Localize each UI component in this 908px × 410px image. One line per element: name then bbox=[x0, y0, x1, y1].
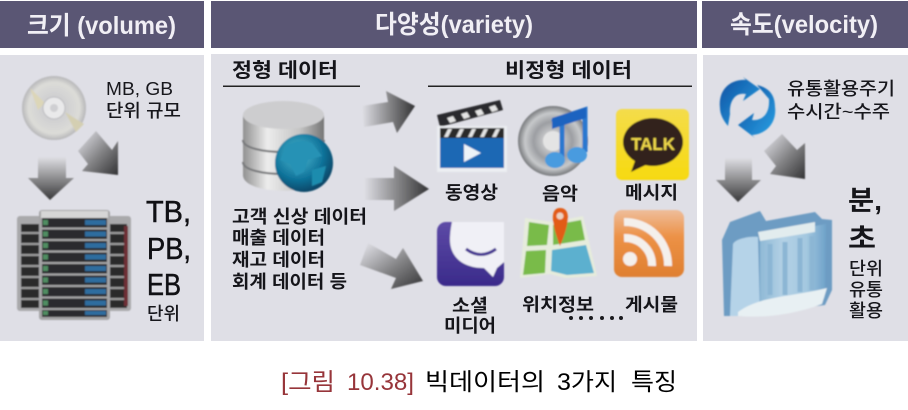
heading: volume: 크기 (volume) bbox=[27, 12, 176, 40]
panel background: volume bbox=[0, 55, 204, 341]
text: minutes, seconds unit: 활용 bbox=[849, 301, 883, 321]
label: video: 동영상 bbox=[445, 183, 498, 203]
heading bar: volume bbox=[0, 1, 204, 48]
caption: 빅데이터의 bbox=[425, 369, 545, 396]
text: minutes, seconds unit: 유통 bbox=[849, 280, 883, 300]
arrow: to unstructured, top bbox=[362, 91, 415, 133]
heading: variety: 다양성(variety) bbox=[375, 11, 533, 39]
text: MB, GB unit scale bbox=[106, 79, 181, 121]
panel: variety bbox=[211, 1, 697, 341]
icon: refresh arrows bbox=[720, 77, 775, 138]
ellipsis dots bbox=[569, 316, 623, 320]
text: TB, PB, EB unit: TB, bbox=[146, 194, 191, 229]
text: TB, PB, EB unit: PB, bbox=[147, 231, 191, 266]
text: minutes, seconds unit: 단위 bbox=[849, 259, 883, 279]
icon: map with pin bbox=[520, 208, 597, 278]
icon: database with globe bbox=[243, 101, 333, 192]
label: location info: 위치정보 bbox=[522, 295, 594, 315]
icon: disc bbox=[22, 76, 86, 140]
panel: volume bbox=[0, 1, 204, 341]
text: TB, PB, EB unit bbox=[146, 194, 191, 324]
icon: social media bbox=[437, 222, 504, 286]
heading bar: variety bbox=[211, 1, 697, 48]
arrow: disc to server, diagonal bbox=[78, 131, 118, 175]
icon: rss feed bbox=[614, 210, 684, 277]
text: minutes, seconds unit: 분, bbox=[848, 186, 882, 216]
icon: video clapperboard bbox=[437, 100, 507, 172]
text: minutes, seconds unit bbox=[848, 186, 883, 321]
text: TB, PB, EB unit: EB bbox=[147, 267, 181, 302]
label: social media: 미디어 bbox=[444, 316, 496, 336]
text: distribution cycle: 수시간~수주 bbox=[787, 102, 890, 122]
heading bar: velocity bbox=[702, 1, 908, 48]
caption bbox=[281, 369, 677, 396]
icon: music bbox=[518, 106, 588, 176]
label: music: 음악 bbox=[542, 184, 578, 204]
text: structured data list: 회계 데이터 등 bbox=[232, 272, 347, 292]
text: distribution cycle: 유통활용주기 bbox=[787, 79, 895, 99]
text: structured data list: 재고 데이터 bbox=[232, 250, 325, 270]
subheading: unstructured data: 비정형 데이터 bbox=[505, 59, 632, 82]
text: MB, GB unit scale: 단위 규모 bbox=[106, 101, 181, 121]
text: structured data list: 매출 데이터 bbox=[232, 228, 325, 248]
text: distribution cycle bbox=[787, 79, 895, 122]
arrow: cycle to folder, down bbox=[716, 158, 761, 202]
subheading: structured data: 정형 데이터 bbox=[232, 59, 338, 82]
text: structured data list bbox=[232, 207, 367, 292]
caption: 특징 bbox=[631, 369, 677, 396]
arrow: disc to server, down bbox=[28, 157, 74, 200]
panel background: velocity bbox=[703, 55, 908, 341]
text: minutes, seconds unit: 초 bbox=[848, 224, 876, 254]
caption: [그림 bbox=[281, 369, 335, 396]
heading: velocity: 속도(velocity) bbox=[730, 11, 878, 39]
arrow: cycle to folder, diagonal bbox=[764, 134, 805, 179]
panel background: variety bbox=[211, 54, 697, 341]
caption: 3가지 bbox=[557, 369, 617, 396]
label: social media: 소셜 bbox=[452, 296, 488, 316]
text: structured data list: 고객 신상 데이터 bbox=[232, 207, 367, 227]
label: social media bbox=[444, 296, 496, 336]
icon: server racks bbox=[17, 210, 131, 320]
arrow: to unstructured, bottom bbox=[360, 243, 423, 289]
icon: talk message: TALK bbox=[631, 134, 675, 154]
arrow: to unstructured, middle bbox=[364, 166, 429, 211]
caption: 10.38] bbox=[347, 369, 414, 396]
icon: talk message bbox=[616, 109, 689, 180]
text: TB, PB, EB unit: 단위 bbox=[147, 304, 180, 324]
label: posts: 게시물 bbox=[625, 295, 678, 315]
panel: velocity bbox=[702, 1, 908, 341]
label: message: 메시지 bbox=[625, 183, 678, 203]
subheading: structured data bbox=[223, 59, 360, 87]
icon: waterfall folder bbox=[722, 211, 832, 317]
text: MB, GB unit scale: MB, GB bbox=[106, 79, 173, 99]
